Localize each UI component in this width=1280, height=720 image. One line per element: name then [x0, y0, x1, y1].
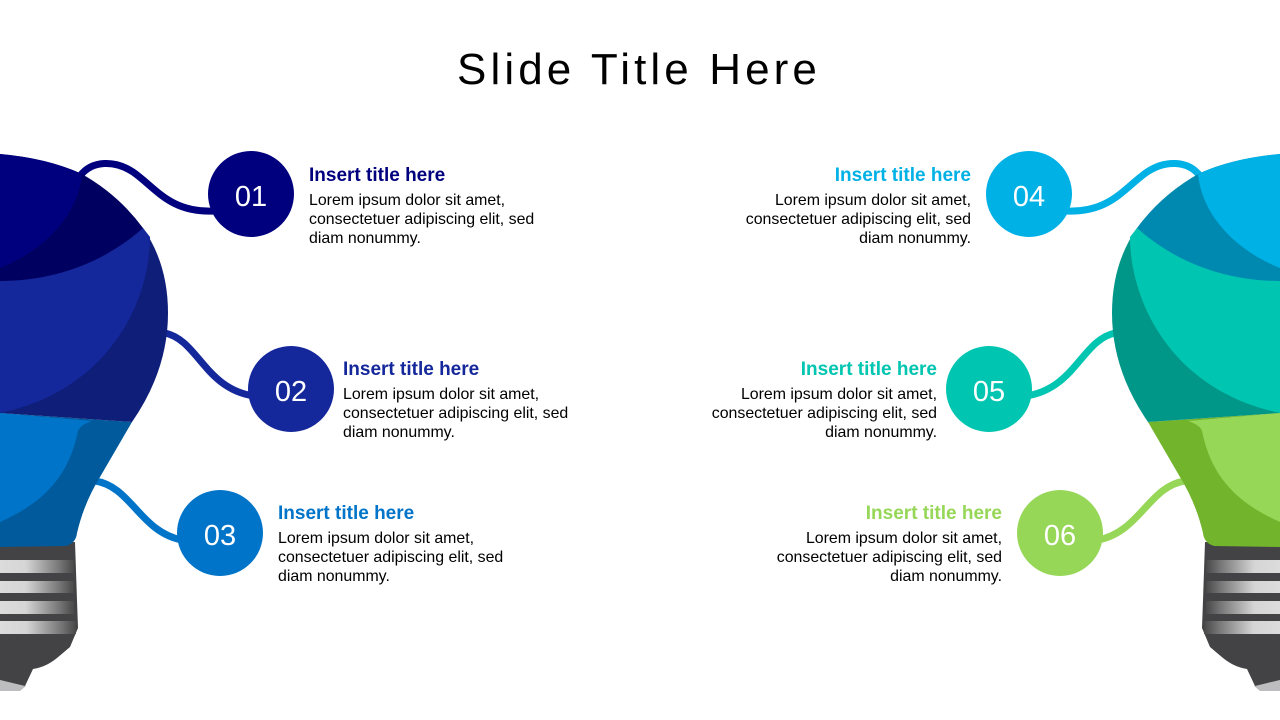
number badge 02	[248, 346, 334, 432]
text block 06: diam nonummy.	[890, 568, 1002, 585]
number badge 02: 02	[275, 376, 307, 408]
text block 03: consectetuer adipiscing elit, sed	[278, 549, 503, 566]
text block 01: consectetuer adipiscing elit, sed	[309, 211, 534, 228]
text block 02: consectetuer adipiscing elit, sed	[343, 405, 568, 422]
text block 04: Insert title here	[835, 165, 971, 186]
text block 03: diam nonummy.	[278, 568, 390, 585]
number badge 01: 01	[235, 181, 267, 213]
text block 03: Insert title here	[278, 503, 414, 524]
text block 04: diam nonummy.	[859, 230, 971, 247]
number badge 06: 06	[1044, 520, 1076, 552]
left bulb	[0, 154, 254, 691]
number badge 03	[177, 490, 263, 576]
bulb section 05	[1112, 228, 1280, 422]
text block 05: diam nonummy.	[825, 424, 937, 441]
text block 06: Insert title here	[866, 503, 1002, 524]
title: Slide Title Here	[457, 45, 821, 94]
text block 01: Insert title here	[309, 165, 445, 186]
text block 03: Lorem ipsum dolor sit amet,	[278, 530, 474, 547]
number badge 05: 05	[973, 376, 1005, 408]
bulb section 01	[0, 154, 143, 281]
text block 02: diam nonummy.	[343, 424, 455, 441]
lamp base	[0, 542, 78, 691]
connector wire 01	[80, 163, 214, 211]
text block 05: Insert title here	[801, 359, 937, 380]
text block 02	[343, 359, 568, 441]
text block 03	[278, 503, 503, 585]
text block 02: Insert title here	[343, 359, 479, 380]
number badge 03: 03	[204, 520, 236, 552]
connector wire 02	[165, 333, 254, 396]
connector wire 03	[95, 481, 182, 540]
number badge 04	[986, 151, 1072, 237]
bulb section 02	[0, 228, 168, 422]
text block 06	[777, 503, 1002, 585]
bulb section 04	[1137, 154, 1280, 281]
bulb section 03	[0, 413, 132, 547]
text block 05: consectetuer adipiscing elit, sed	[712, 405, 937, 422]
connector wire 05	[1026, 333, 1115, 396]
text block 04: Lorem ipsum dolor sit amet,	[775, 192, 971, 209]
text block 02: Lorem ipsum dolor sit amet,	[343, 386, 539, 403]
text block 05: Lorem ipsum dolor sit amet,	[741, 386, 937, 403]
text block 01	[309, 165, 534, 247]
number badge 06	[1017, 490, 1103, 576]
bulb section 06	[1148, 413, 1280, 547]
text block 01: Lorem ipsum dolor sit amet,	[309, 192, 505, 209]
lamp base	[1202, 542, 1280, 691]
text block 06: consectetuer adipiscing elit, sed	[777, 549, 1002, 566]
text block 04: consectetuer adipiscing elit, sed	[746, 211, 971, 228]
text block 01: diam nonummy.	[309, 230, 421, 247]
text block 06: Lorem ipsum dolor sit amet,	[806, 530, 1002, 547]
number badge 05	[946, 346, 1032, 432]
number badge 01	[208, 151, 294, 237]
text block 04	[746, 165, 971, 247]
connector wire 06	[1098, 481, 1185, 540]
text block 05	[712, 359, 937, 441]
number badge 04: 04	[1013, 181, 1045, 213]
connector wire 04	[1066, 163, 1200, 211]
right bulb	[1026, 154, 1280, 691]
